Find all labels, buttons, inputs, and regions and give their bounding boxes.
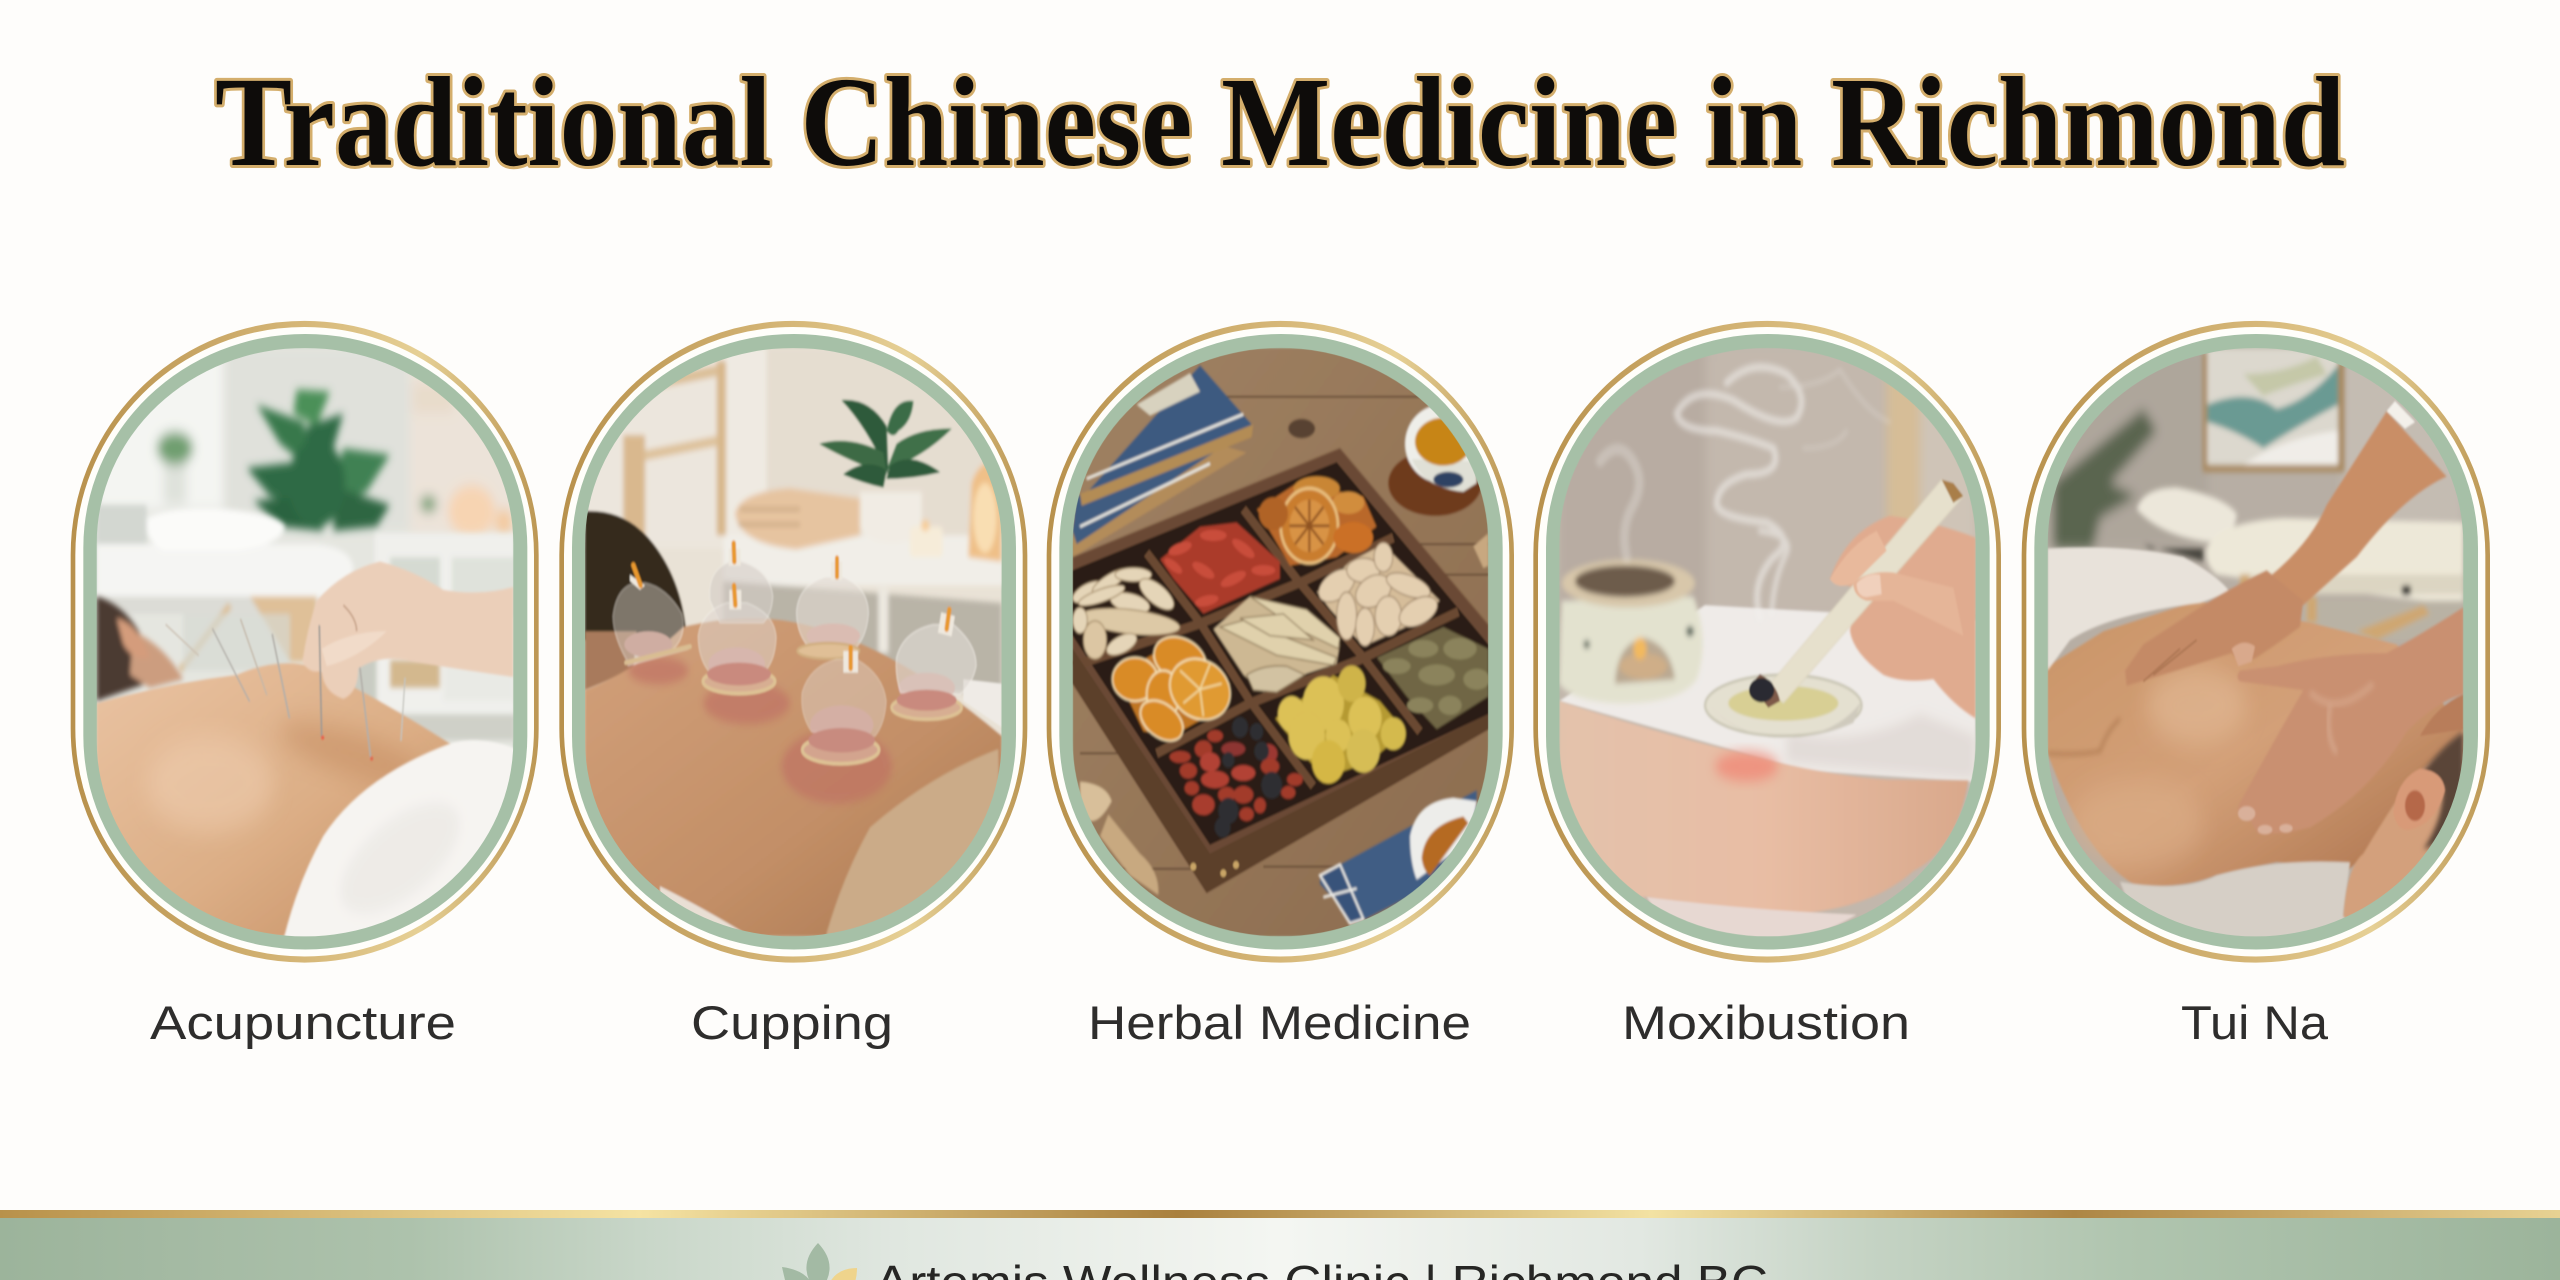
photo: moxa stick over arm (1559, 348, 1977, 941)
plant (819, 400, 952, 487)
table (2206, 518, 2463, 605)
ginger roots (1080, 782, 1112, 821)
table and sheet (963, 679, 1002, 727)
tray (1073, 448, 1488, 893)
plant (247, 389, 390, 531)
label: Cupping: Cupping (691, 996, 893, 1049)
label: Herbal Medicine: Herbal Medicine (1088, 996, 1471, 1049)
tan slices upper right (1317, 544, 1440, 647)
painting (2203, 348, 2344, 472)
footer band (0, 1210, 2560, 1280)
back (2048, 601, 2463, 886)
label: Acupuncture: Acupuncture (150, 996, 456, 1049)
panel: acupuncture (73, 324, 536, 960)
beige towel (827, 749, 1002, 941)
fingers (1830, 531, 1887, 586)
photo: tui na massage (2048, 348, 2463, 941)
therapist lower arm and hand (2237, 607, 2463, 834)
face cradle (2137, 487, 2237, 542)
label: Moxibustion: Moxibustion (1622, 996, 1910, 1049)
dish (1705, 675, 1862, 738)
head (585, 511, 687, 640)
orange slices left (1117, 644, 1230, 736)
moxa stick (1767, 480, 1963, 703)
ceramic burner (1559, 559, 1703, 703)
hand behind (1830, 516, 1976, 718)
arm (1559, 701, 1968, 915)
photo: acupuncture treatment (97, 348, 517, 941)
back (97, 663, 452, 936)
table cloth (1559, 605, 1976, 782)
pale sliced root left (1070, 564, 1181, 660)
icon: leaf logo (782, 1243, 857, 1280)
smoke (1600, 367, 1890, 618)
yellow chrysanthemum (1275, 675, 1405, 777)
massage table (97, 544, 353, 599)
dark red fruits (1170, 718, 1303, 832)
red marks (628, 657, 892, 803)
cups (613, 543, 976, 764)
shelf (375, 533, 515, 716)
pale strips middle (1213, 596, 1340, 692)
gold divider (0, 1210, 2560, 1218)
title: Traditional Chinese Medicine in Richmond (215, 51, 2345, 193)
books (1073, 365, 1253, 557)
olive leaves (1377, 627, 1488, 729)
orange peel top (1257, 483, 1377, 566)
goji berries (1160, 522, 1280, 614)
back (585, 618, 1002, 936)
herbs group (1070, 405, 1490, 923)
panel: herbal medicine (1049, 324, 1512, 960)
teacup bottom right (1410, 798, 1477, 880)
towel (2048, 547, 2230, 671)
white towel (283, 740, 517, 941)
small piece right (1473, 533, 1488, 568)
sheet under arm (1647, 897, 1857, 941)
panel: moxibustion (1536, 324, 1999, 960)
teacup top right (1388, 450, 1482, 516)
therapist upper arm and hand (2267, 411, 2447, 614)
needles (166, 620, 405, 758)
panel: cupping (562, 324, 1025, 960)
gloved hand (302, 562, 513, 699)
book bottom right (1320, 790, 1477, 923)
label: Tui Na: Tui Na (2181, 996, 2329, 1049)
photo: glass cups on back (585, 348, 1003, 941)
head and neck (97, 596, 183, 701)
photo: tray of dried herbs (1070, 348, 1490, 936)
head (2343, 729, 2463, 941)
panel: tui na (2024, 324, 2488, 960)
sheet bottom (2120, 861, 2360, 941)
